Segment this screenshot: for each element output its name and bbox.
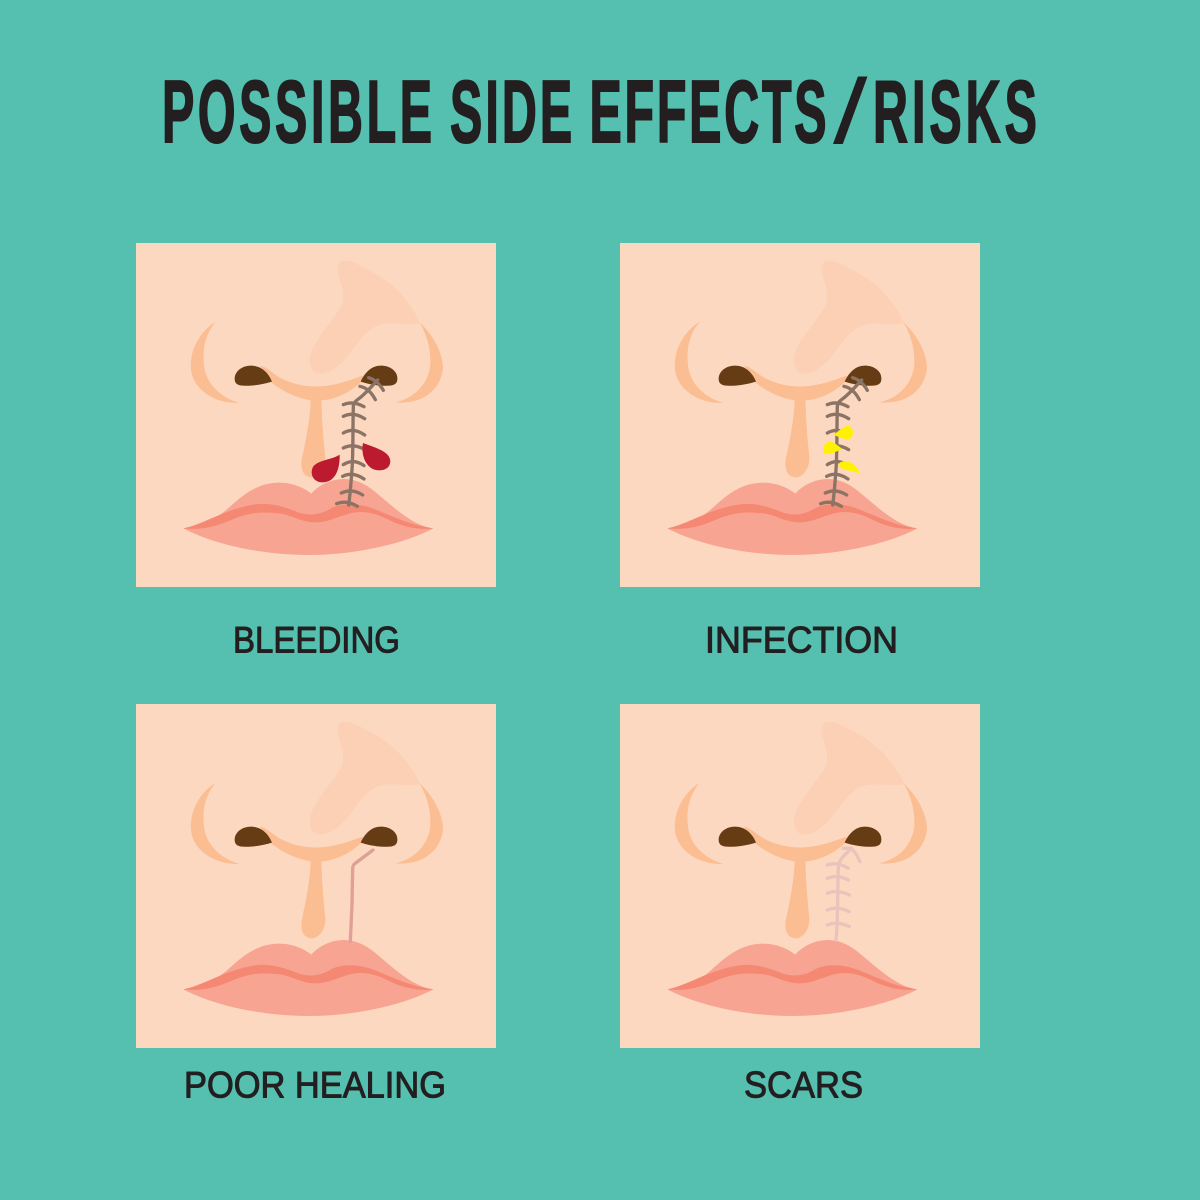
icon: stitches [821,378,867,506]
icon: uneven scar line [350,850,373,941]
title: RISKS [873,64,1037,162]
panel: poor healing [136,704,496,1048]
title: SIDE [450,64,572,162]
panel: bleeding [136,243,496,587]
icon: blood drops [312,443,390,482]
icon: healed scar [827,848,860,940]
title: / [833,61,868,163]
label: bleeding: BLEEDING [233,620,400,660]
panel: scars [620,704,980,1048]
title: POSSIBLE [162,64,432,162]
label: infection: INFECTION [705,620,898,660]
icon: stitches [337,378,383,506]
title: EFFECTS [590,64,827,162]
label: scars: SCARS [744,1064,863,1106]
panel: infection [620,243,980,587]
icon: pus drops [823,426,860,473]
title [162,61,1037,163]
label: poor healing: POOR HEALING [184,1064,446,1106]
